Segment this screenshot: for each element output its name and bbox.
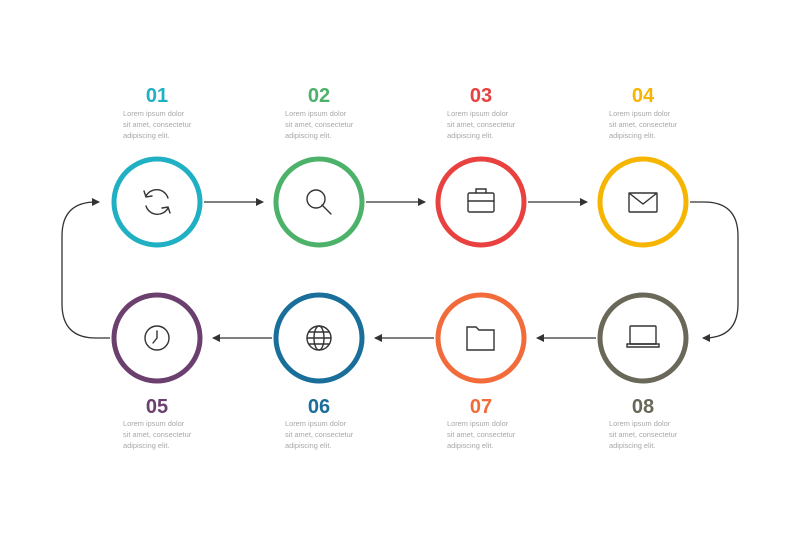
descriptions xyxy=(123,109,678,450)
descriptions: Lorem ipsum dolor xyxy=(609,109,670,118)
descriptions: Lorem ipsum dolor xyxy=(447,109,508,118)
step numbers xyxy=(146,85,655,418)
icon: clock xyxy=(145,326,169,350)
descriptions: sit amet, consectetur xyxy=(123,430,192,439)
descriptions: adipiscing elit. xyxy=(609,441,655,450)
step numbers: 06 xyxy=(308,396,330,418)
step numbers: 07 xyxy=(470,396,492,418)
icons xyxy=(144,189,659,350)
arrow: left connector xyxy=(62,202,110,338)
arrow: right connector xyxy=(690,202,738,338)
arrows bottom row xyxy=(213,337,596,339)
descriptions: adipiscing elit. xyxy=(285,131,331,140)
icon: search xyxy=(307,190,331,214)
descriptions: sit amet, consectetur xyxy=(123,120,192,129)
descriptions: sit amet, consectetur xyxy=(285,120,354,129)
icon: globe xyxy=(307,326,331,350)
descriptions: sit amet, consectetur xyxy=(609,120,678,129)
step numbers: 04 xyxy=(632,85,655,107)
descriptions: adipiscing elit. xyxy=(447,441,493,450)
descriptions: sit amet, consectetur xyxy=(447,430,516,439)
step numbers: 01 xyxy=(146,85,168,107)
descriptions: sit amet, consectetur xyxy=(285,430,354,439)
step numbers: 05 xyxy=(146,396,168,418)
icon: laptop xyxy=(627,326,659,347)
descriptions: Lorem ipsum dolor xyxy=(123,109,184,118)
icon: briefcase xyxy=(468,189,494,212)
descriptions: adipiscing elit. xyxy=(609,131,655,140)
step numbers: 02 xyxy=(308,85,330,107)
step numbers: 03 xyxy=(470,85,492,107)
circles xyxy=(114,159,686,381)
arrows top row xyxy=(204,201,587,203)
descriptions: Lorem ipsum dolor xyxy=(285,109,346,118)
descriptions: Lorem ipsum dolor xyxy=(285,419,346,428)
icon: mail xyxy=(629,193,657,212)
step numbers: 08 xyxy=(632,396,654,418)
descriptions: adipiscing elit. xyxy=(447,131,493,140)
descriptions: Lorem ipsum dolor xyxy=(123,419,184,428)
descriptions: adipiscing elit. xyxy=(123,131,169,140)
descriptions: adipiscing elit. xyxy=(285,441,331,450)
descriptions: adipiscing elit. xyxy=(123,441,169,450)
descriptions: Lorem ipsum dolor xyxy=(609,419,670,428)
descriptions: sit amet, consectetur xyxy=(447,120,516,129)
descriptions: Lorem ipsum dolor xyxy=(447,419,508,428)
descriptions: sit amet, consectetur xyxy=(609,430,678,439)
icon: folder xyxy=(467,327,494,350)
icon: refresh xyxy=(144,190,170,214)
